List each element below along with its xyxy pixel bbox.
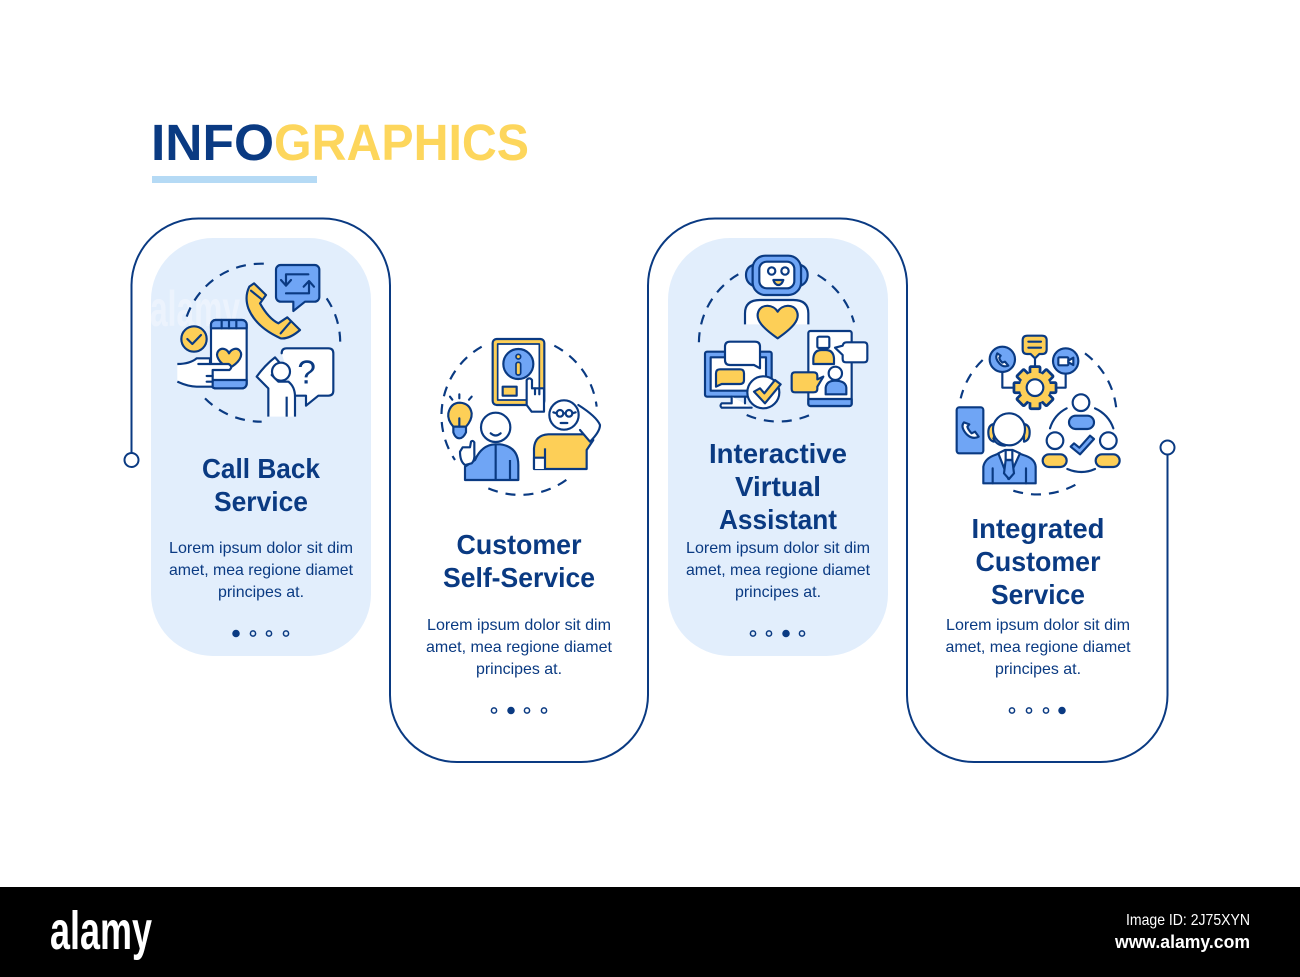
card text: interactive virtual assistant: Interactive — [709, 438, 847, 469]
icon: integrated customer service — [957, 336, 1120, 494]
panel: light background call back — [151, 238, 371, 656]
card text: call back service: Call Back — [202, 453, 320, 484]
footer bar: Image ID: 2J75XYN — [1126, 912, 1250, 929]
card text: call back service: Lorem ipsum dolor sit dim — [169, 540, 353, 557]
card text: interactive virtual assistant: principes at. — [735, 584, 821, 601]
card text: customer self-service: Lorem ipsum dolor sit dim — [427, 617, 611, 634]
card text: interactive virtual assistant: Lorem ipsum dolor sit dim — [686, 540, 870, 557]
card text: customer self-service: principes at. — [476, 661, 562, 678]
pagination dots: card 3 — [750, 630, 805, 636]
card text: integrated customer service: principes at. — [995, 661, 1081, 678]
icon: interactive virtual assistant — [699, 256, 867, 422]
card text: interactive virtual assistant: Assistant — [719, 504, 837, 535]
pagination dots: card 1 — [233, 630, 289, 636]
card text: integrated customer service: Integrated — [972, 513, 1104, 544]
title: GRAPHICS — [274, 114, 529, 171]
card text: interactive virtual assistant — [686, 438, 871, 601]
title: INFO — [151, 114, 274, 171]
card text: integrated customer service: Service — [991, 579, 1085, 610]
card text: customer self-service: Customer — [456, 529, 582, 560]
icon: call back service: ? — [297, 354, 316, 391]
card text: integrated customer service: amet, mea regione diamet — [946, 639, 1131, 656]
pagination dots: card 2 — [491, 708, 547, 714]
icon: call back service — [177, 264, 340, 422]
watermark: alamy — [150, 281, 240, 337]
footer bar: alamy — [50, 901, 152, 961]
card text: call back service: amet, mea regione diamet — [169, 562, 354, 579]
card text: integrated customer service: Lorem ipsum dolor sit dim — [946, 617, 1130, 634]
panel: light background virtual assistant — [668, 238, 888, 656]
footer bar: www.alamy.com — [1114, 932, 1250, 952]
card text: customer self-service — [426, 529, 613, 678]
serpentine outline connecting the cards — [124, 218, 1174, 762]
icon: customer self-service — [441, 339, 600, 495]
card text: integrated customer service — [946, 513, 1131, 678]
card text: customer self-service: amet, mea regione diamet — [426, 639, 613, 656]
card text: customer self-service: Self-Service — [443, 562, 595, 593]
card text: call back service: Service — [214, 486, 308, 517]
title — [151, 114, 529, 183]
card text: integrated customer service: Customer — [976, 546, 1101, 577]
card text: call back service: principes at. — [218, 584, 304, 601]
card text: interactive virtual assistant: Virtual — [735, 471, 821, 502]
footer bar — [0, 887, 1300, 977]
card text: call back service — [169, 453, 354, 601]
card text: interactive virtual assistant: amet, mea regione diamet — [686, 562, 871, 579]
pagination dots: card 4 — [1009, 708, 1065, 714]
